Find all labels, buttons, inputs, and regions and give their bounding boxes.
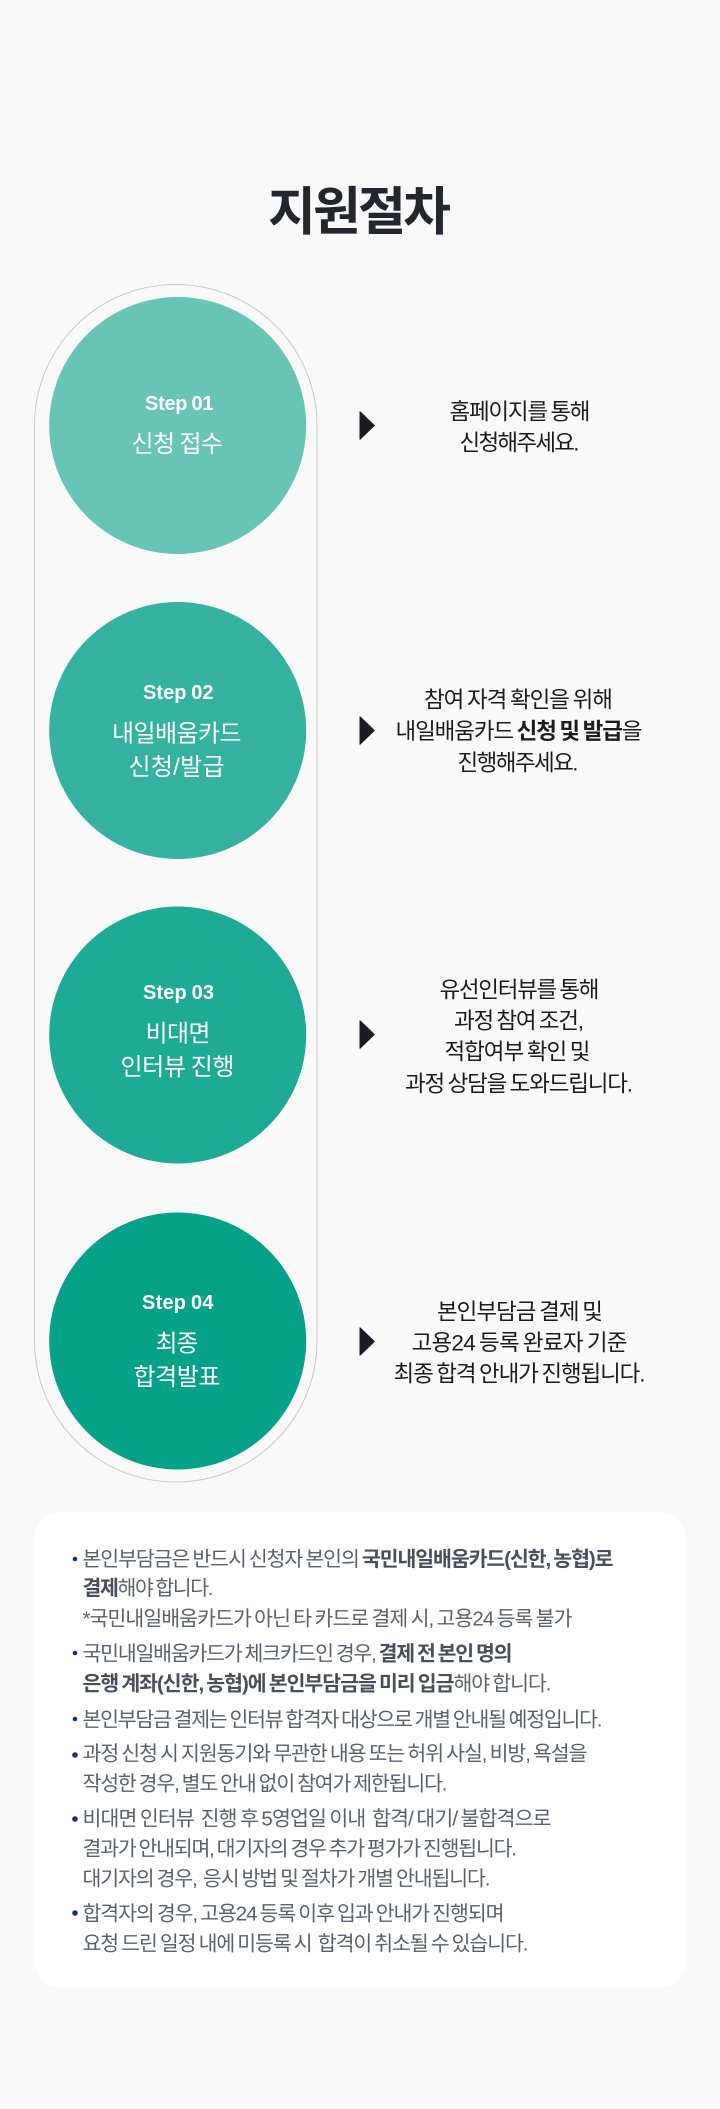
step 1 arrow [360,411,375,440]
step 3 circle [49,906,306,1164]
step 3 name: 인터뷰 진행 [120,1054,234,1081]
note 4: 과정 신청 시 지원동기와 무관한 내용 또는 허위 사실, 비방, 욕설을 [82,1742,588,1766]
step 4 label: Step 04 [142,1292,214,1314]
step 2 label: Step 02 [143,682,214,704]
step 2 circle [49,602,306,859]
step 3 label: Step 03 [143,982,214,1004]
note 2: 국민내일배움카드가 체크카드인 경우, 결제 전 본인 명의 [82,1642,512,1666]
step 4 name: 합격발표 [134,1364,220,1391]
note 5: 결과가 안내되며, 대기자의 경우 추가 평가가 진행됩니다. [82,1838,517,1860]
step 1 description [450,400,590,456]
note 3: 본인부담금 결제는 인터뷰 합격자 대상으로 개별 안내될 예정입니다. [82,1708,602,1732]
title: 지원절차 [268,184,451,242]
note 4: 작성한 경우, 별도 안내 없이 참여가 제한됩니다. [82,1772,448,1796]
panel: notes card [34,1512,686,1988]
step 1 circle [49,297,306,554]
step 3 description: 적합여부 확인 및 [444,1040,590,1064]
note 1: 본인부담금은 반드시 신청자 본인의 국민내일배움카드(신한, 농협)로 [82,1548,614,1571]
step 4 [49,1212,645,1470]
step 4 description: 고용24 등록 완료자 기준 [412,1330,628,1356]
step 2 arrow [360,716,375,745]
step 2 [49,602,642,859]
step 2 description [396,688,642,776]
step 2 description: 진행해주세요. [458,750,578,776]
step 2 description: 참여 자격 확인을 위해 [424,688,613,712]
step 1 [49,297,590,554]
step 3 [49,906,633,1164]
step 2 name: 신청/발급 [128,754,224,781]
note 2: 은행 계좌(신한, 농협)에 본인부담금을 미리 입금해야 합니다. [82,1672,552,1696]
step 4 name [134,1330,220,1391]
note 1: 결제해야 합니다. [82,1577,214,1600]
step 3 name [120,1020,234,1081]
step 4 description [394,1300,646,1386]
card background [34,1512,686,1988]
step 1 label: Step 01 [145,393,214,415]
step 1 description: 신청해주세요. [460,430,580,456]
step 4 circle [49,1212,306,1470]
step 3 description: 과정 상담을 도와드립니다. [405,1072,633,1096]
note 5: 대기자의 경우, 응시 방법 및 절차가 개별 안내됩니다. [82,1868,490,1890]
step 3 arrow [360,1020,375,1049]
note 6: 요청 드린 일정 내에 미등록 시 합격이 취소될 수 있습니다. [82,1932,528,1956]
note 1 [73,1548,614,1630]
step 2 description: 내일배움카드 신청 및 발급을 [396,719,642,744]
note 5: 비대면 인터뷰 진행 후 5영업일 이내 합격/ 대기/ 불합격으로 [82,1808,552,1830]
step 2 name: 내일배움카드 [112,720,242,748]
step 4 arrow [360,1327,375,1356]
note 1: *국민내일배움카드가 아닌 타 카드로 결제 시, 고용24 등록 불가 [82,1608,573,1630]
note 6: 합격자의 경우, 고용24 등록 이후 입과 안내가 진행되며 [82,1902,504,1926]
step 3 description [405,978,633,1096]
step 4 description: 최종 합격 안내가 진행됩니다. [394,1362,646,1386]
step 2 name [112,720,242,781]
step 1 name: 신청 접수 [132,431,223,458]
step 1 description: 홈페이지를 통해 [450,400,590,424]
step 4 name: 최종 [156,1330,198,1358]
note 4 [72,1742,587,1796]
step 4 description: 본인부담금 결제 및 [437,1300,603,1324]
step 3 description: 과정 참여 조건, [454,1008,584,1034]
note 6 [72,1902,528,1956]
panel: steps capsule outline [34,284,317,1482]
step 3 name: 비대면 [146,1020,210,1048]
step 3 description: 유선인터뷰를 통해 [440,978,600,1002]
note 2 [73,1642,551,1696]
note 5 [72,1808,551,1890]
